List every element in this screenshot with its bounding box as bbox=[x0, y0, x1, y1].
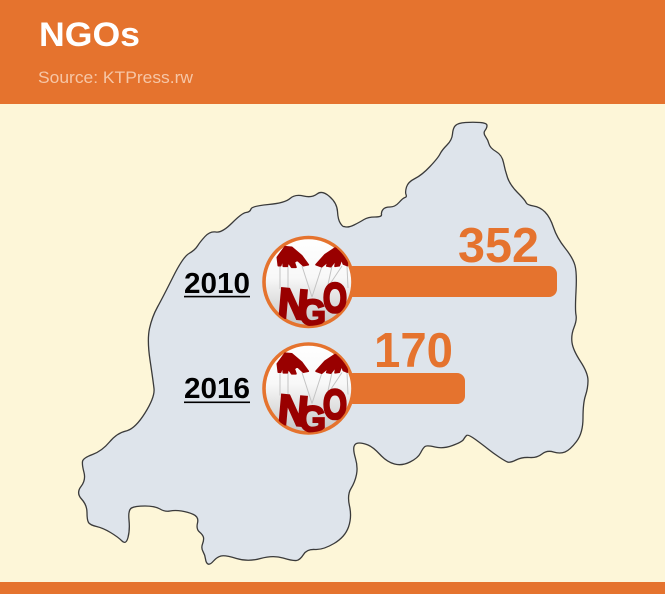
icon: NGO puppet hands 2016 bbox=[264, 344, 353, 440]
header band bbox=[0, 0, 665, 104]
map of Rwanda bbox=[79, 122, 588, 564]
value 352: 352 bbox=[458, 219, 539, 273]
icon: NGO puppet hands 2010: N bbox=[276, 279, 310, 329]
bar 2010 bbox=[345, 266, 557, 297]
icon: NGO puppet hands 2010: O bbox=[323, 274, 347, 321]
icon: NGO puppet hands 2016: G bbox=[299, 398, 326, 440]
icon: NGO puppet hands 2010 bbox=[264, 238, 353, 333]
icon: NGO puppet hands 2016: N bbox=[276, 386, 310, 435]
bar 2016 bbox=[345, 373, 465, 404]
year label 2016: 2016 bbox=[184, 373, 250, 405]
value 170: 170 bbox=[374, 324, 453, 378]
icon: NGO puppet hands 2016: O bbox=[323, 380, 347, 428]
icon: NGO puppet hands 2010: G bbox=[299, 292, 326, 333]
title: NGOs bbox=[39, 16, 140, 54]
source line: Source: KTPress.rw bbox=[38, 68, 194, 87]
footer band bbox=[0, 582, 665, 594]
year label 2010: 2010 bbox=[184, 268, 250, 300]
